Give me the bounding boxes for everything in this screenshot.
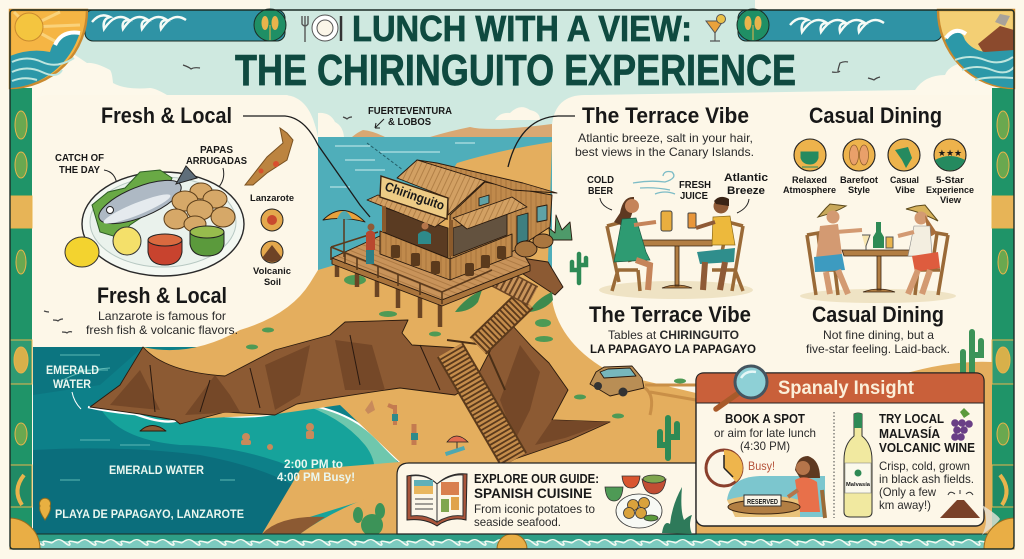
place: PLAYA DE PAPAGAYO, LANZAROTE: [55, 507, 244, 521]
rim: [90, 177, 236, 267]
guide panel: [397, 463, 696, 534]
book a spot text: BOOK A SPOT: [725, 412, 805, 426]
location label: [40, 498, 244, 521]
top right wave band: [738, 10, 942, 41]
title line 2: THE CHIRINGUITO EXPERIENCE: [235, 46, 796, 95]
title block: [235, 8, 796, 95]
arrow to fish: [104, 170, 117, 186]
rear roof: [417, 160, 557, 193]
divider: [833, 412, 835, 518]
sea scene: [727, 476, 825, 517]
body: or aim for late lunch: [714, 426, 816, 440]
wine bottle: [844, 413, 872, 517]
reserved sign: RESERVED: [747, 497, 778, 506]
busy label: Busy!: [748, 459, 775, 473]
label view: View: [940, 195, 962, 206]
label soil: Soil: [264, 277, 281, 288]
icon: casual vibe: [888, 139, 920, 171]
body line 2: five-star feeling. Laid-back.: [806, 342, 950, 356]
person on deck: [366, 224, 375, 264]
subheading: Fresh & Local: [97, 283, 227, 308]
floor shadow: [800, 289, 956, 303]
right border: [992, 88, 1014, 549]
stairs upper flight: [497, 277, 533, 296]
bartender: [418, 222, 431, 244]
agave plant: [662, 487, 692, 534]
left border ornaments: [10, 111, 32, 507]
cactus near road: [660, 418, 677, 458]
mojo surface: [190, 226, 224, 238]
body line 3: (Only a few: [879, 485, 936, 499]
line 2: WATER: [53, 379, 92, 391]
reserved sign: [744, 495, 781, 506]
body: Lanzarote is famous for: [98, 309, 226, 323]
sign: [380, 176, 448, 219]
bottle: [873, 222, 884, 248]
birds: [44, 62, 880, 333]
bottom corner fans: [10, 518, 1014, 549]
left chair: [807, 233, 838, 295]
insight box: [696, 366, 984, 526]
sea highlights: [330, 143, 475, 187]
fuerteventura label: FUERTEVENTURA: [368, 106, 452, 117]
label beer: BEER: [588, 186, 614, 197]
label relaxed: Relaxed: [792, 175, 827, 186]
red sauce pot: [148, 240, 182, 265]
wine bottle: Malvasía: [846, 482, 871, 488]
interior right: [453, 212, 507, 256]
deck posts: [337, 262, 440, 327]
woman: [614, 197, 656, 290]
emerald water label: EMERALD WATER: [109, 465, 205, 477]
left border: [10, 88, 32, 549]
emerald water: [33, 347, 413, 534]
label volcanic: Volcanic: [253, 266, 291, 277]
beach people and umbrella: [365, 400, 468, 456]
fish tail: [176, 166, 197, 184]
distant islands: [352, 124, 552, 137]
icon: open book: [407, 474, 467, 526]
stools: [391, 245, 506, 276]
sand behind insight box: [696, 362, 992, 534]
icon: soil: [261, 241, 283, 263]
car on the road: [590, 366, 644, 396]
deck floor: [332, 235, 530, 300]
rear wall: [450, 182, 552, 282]
emerald water callout: EMERALD: [46, 365, 99, 377]
body: Crisp, cold, grown: [879, 459, 970, 473]
label experience: Experience: [926, 185, 974, 196]
stairs middle flight: [478, 300, 525, 346]
mojo red surface: [148, 234, 182, 246]
label lanzarote: Lanzarote: [250, 193, 294, 204]
label papas: PAPAS: [200, 145, 233, 156]
rocks: [515, 234, 553, 257]
left brown cliff: [90, 320, 472, 424]
label arrugadas: ARRUGADAS: [186, 156, 247, 167]
heading line 2: SPANISH CUISINE: [474, 486, 592, 501]
arrows: [600, 198, 749, 213]
top left band medallion: [254, 9, 286, 41]
main roof: [397, 160, 485, 215]
top left wave band: [85, 10, 285, 41]
icon: clock: [706, 450, 743, 486]
whole lemon: [65, 237, 99, 267]
top left corner medallion: [10, 10, 87, 88]
body line 2: LA PAPAGAYO LA PAPAGAYO: [590, 342, 756, 356]
road: [645, 385, 696, 415]
label casual: Casual: [890, 175, 919, 186]
man in hat: [814, 204, 862, 294]
wind lines: [633, 172, 675, 194]
subheading: Casual Dining: [812, 302, 944, 327]
label atlantic: Atlantic: [724, 172, 768, 184]
body line 2: fresh fish & volcanic flavors.: [86, 323, 238, 337]
header: [696, 373, 984, 403]
bar counter front: [380, 231, 512, 280]
heading line 3: VOLCANIC WINE: [879, 441, 975, 455]
cactus by terrace: [572, 254, 586, 283]
sand patch: [727, 495, 800, 517]
left awning: [367, 195, 447, 227]
top right corner medallion: [938, 10, 1014, 88]
icon: magnifier: [716, 366, 767, 409]
floor shadow: [599, 281, 753, 299]
icon: small volcano: [940, 490, 980, 518]
wine glass: [862, 235, 870, 250]
body line 2: seaside seafood.: [474, 515, 561, 529]
prickly pear: [353, 503, 385, 536]
fish belly: [101, 190, 173, 228]
icon: five star view: [934, 139, 966, 171]
lanzarote map: [245, 128, 293, 185]
cliff behind stairs: [515, 257, 563, 295]
lower left land: [262, 488, 397, 534]
label style: Style: [848, 185, 870, 196]
emerald water callout: [46, 365, 99, 409]
body: Atlantic breeze, salt in your hair,: [578, 131, 753, 145]
woman in hat: [898, 205, 940, 294]
woman at table: [788, 456, 825, 518]
icon: plate and cutlery: [302, 15, 341, 42]
green sauce pot: [190, 232, 224, 256]
swimmers: [241, 423, 314, 450]
leader line: [243, 116, 370, 217]
label barefoot: Barefoot: [840, 175, 879, 186]
sky: [33, 0, 1000, 150]
door: [517, 213, 528, 244]
heading: Casual Dining: [809, 103, 942, 128]
table: [639, 240, 714, 288]
juice glass: [886, 237, 893, 248]
busy hours label: [277, 459, 355, 484]
right border ornaments: [992, 111, 1014, 507]
sea behind the chiringuito: [318, 137, 552, 300]
icon: barefoot style: [843, 139, 875, 171]
arrow: [375, 119, 384, 128]
chiringuito hut: [331, 160, 557, 327]
body line 4: km away!): [879, 498, 931, 512]
box: [696, 373, 984, 526]
parasol: [323, 210, 365, 257]
label line 2: & LOBOS: [388, 117, 431, 128]
label atmosphere: Atmosphere: [783, 185, 836, 196]
agave near hut: [549, 215, 572, 240]
left chair: [607, 222, 640, 291]
body: From iconic potatoes to: [474, 502, 595, 516]
potatoes: [164, 183, 235, 232]
cream panel: terrace and casual dining: [552, 95, 992, 534]
label fresh: FRESH: [679, 180, 711, 191]
beer mug: [661, 211, 672, 231]
label breeze: Breeze: [727, 185, 765, 197]
juice: [688, 213, 696, 228]
small green shrubs: [246, 275, 686, 418]
terrace vibe panel: [508, 103, 768, 356]
right chair: [915, 233, 948, 295]
right brown cliff: [470, 322, 610, 460]
volcano dots: [258, 161, 279, 174]
small rock in water: [140, 426, 166, 431]
sign text: Chiringuito: [383, 179, 447, 213]
subheading: The Terrace Vibe: [589, 302, 751, 327]
time: (4:30 PM): [740, 439, 790, 453]
support posts: [384, 206, 451, 256]
arrow: [72, 392, 81, 409]
body line 2: best views in the Canary Islands.: [575, 145, 754, 159]
clouds over the sea: [318, 107, 540, 137]
fish eye: [106, 206, 114, 214]
title line 1: LUNCH WITH A VIEW:: [352, 8, 692, 49]
dashed sight line: [367, 143, 403, 170]
try local heading: TRY LOCAL: [879, 412, 944, 426]
label cold: COLD: [587, 175, 614, 186]
lettuce: [92, 170, 172, 238]
body line 2: in black ash fields.: [879, 472, 974, 486]
body: Tables at CHIRINGUITO: [608, 328, 739, 342]
cactus by insight box: [963, 332, 981, 374]
icon: pin: [40, 498, 50, 520]
plate: [82, 172, 244, 276]
heading: Fresh & Local: [101, 103, 232, 128]
fuerteventura label: [368, 106, 452, 128]
icon: cocktail: [706, 14, 726, 41]
top right band medallion: [737, 9, 769, 41]
arrow to potatoes: [217, 168, 224, 189]
leader line: [508, 116, 575, 167]
interior left: [385, 208, 448, 258]
round table: [728, 500, 800, 514]
label line 2: THE DAY: [59, 165, 100, 176]
label vibe: Vibe: [895, 185, 915, 196]
line 2: 4:00 PM Busy!: [277, 472, 355, 484]
bottom border: [10, 534, 1014, 549]
label juice: JUICE: [680, 191, 708, 202]
left section: fresh and local: [55, 103, 370, 337]
plate of food: [65, 166, 244, 276]
heading line 1: EXPLORE OUR GUIDE:: [474, 472, 599, 486]
window: [537, 205, 547, 222]
upper window: [479, 195, 489, 206]
table: [842, 250, 916, 292]
fish: [94, 172, 186, 232]
icon: five star view: ★★★: [938, 148, 962, 158]
heading line 2: MALVASÍA: [879, 426, 940, 441]
label catch of the day: CATCH OF: [55, 153, 104, 164]
stairs lower flight: [447, 340, 514, 460]
right awning: [453, 197, 527, 229]
lemon half: [113, 227, 141, 255]
sand headland and road: [143, 142, 696, 534]
icon: relaxed atmosphere: [794, 139, 826, 171]
right chair: [712, 222, 743, 291]
body: Not fine dining, but a: [823, 328, 934, 342]
man: [696, 197, 735, 290]
casual dining panel: [783, 103, 974, 356]
label five star: 5-Star: [936, 175, 964, 186]
cream panel: fresh and local: [33, 95, 318, 347]
railing: [331, 232, 492, 304]
heading: The Terrace Vibe: [582, 103, 749, 128]
icon: food bowls and plate: [605, 475, 666, 528]
sparkle watermark: [982, 505, 1000, 535]
busy hours label: 2:00 PM to: [284, 459, 343, 471]
header title: Spanaly Insight: [778, 378, 915, 399]
icon: volcanic: [261, 209, 283, 231]
panel box: [397, 463, 696, 534]
deck edge: [332, 258, 530, 306]
icon: grapes: [951, 408, 973, 441]
